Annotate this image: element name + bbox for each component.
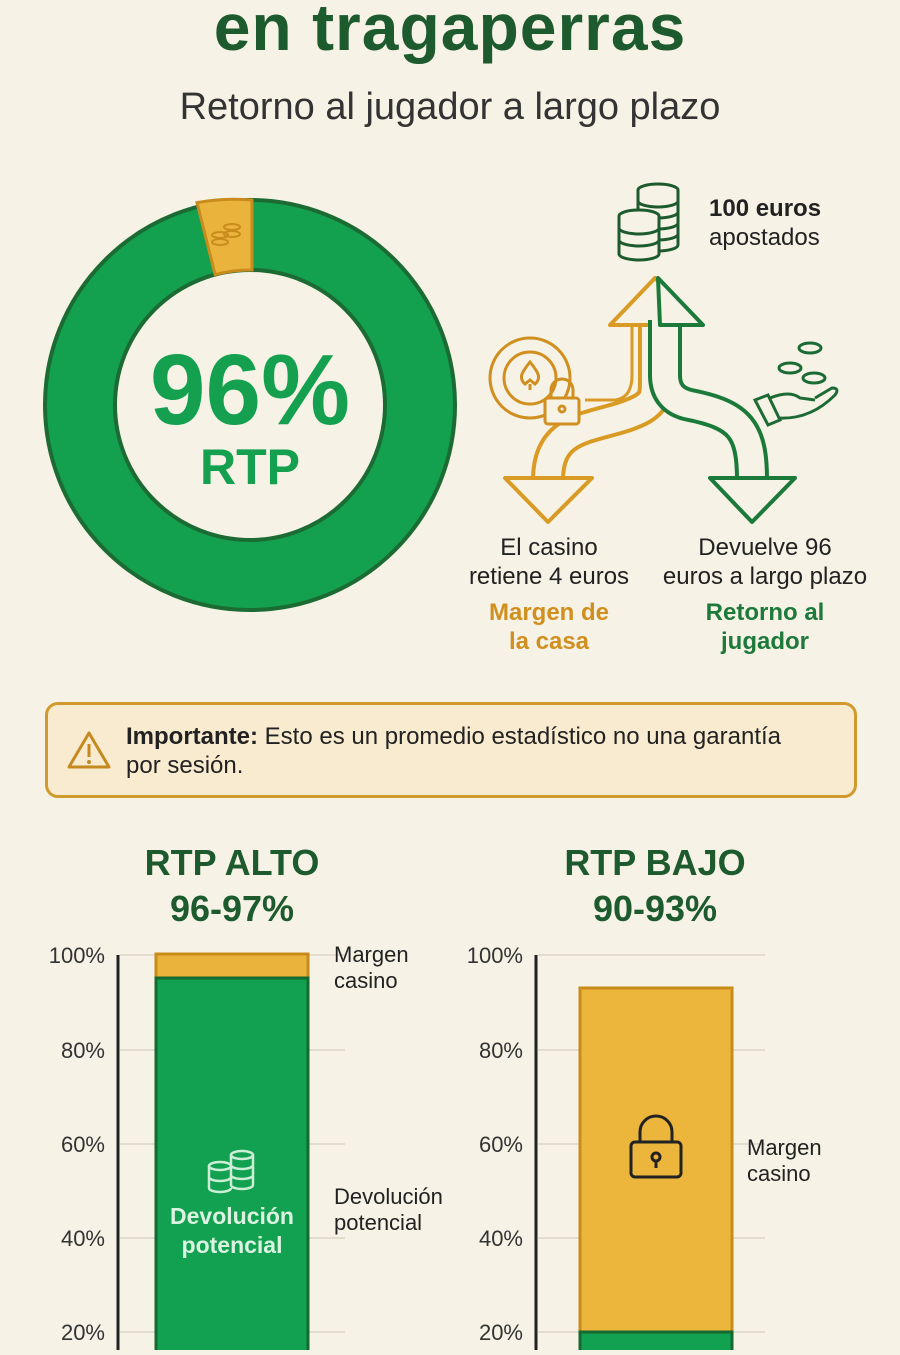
donut label: RTP <box>200 439 300 495</box>
label: margen de la casa <box>489 599 609 655</box>
label: devuelve 96: euros a largo plazo <box>663 563 867 590</box>
axis labels: 100% <box>49 943 105 968</box>
axis labels: 60% <box>479 1132 523 1157</box>
bar: RTP alto: potencial <box>182 1232 282 1258</box>
label: devuelve 96: Devuelve 96 <box>698 534 832 561</box>
bar charts <box>49 942 822 1350</box>
axis labels: 80% <box>61 1038 105 1063</box>
donut chart <box>43 198 457 612</box>
bar labels: RTP alto: casino <box>334 968 398 993</box>
label: 100 euros apostados: apostados <box>709 224 820 251</box>
heading: RTP alto: RTP ALTO <box>145 842 319 883</box>
green arrow <box>658 278 795 522</box>
heading: RTP alto: 96-97% <box>170 888 294 929</box>
bar labels: RTP bajo: casino <box>747 1161 811 1186</box>
bar: RTP alto <box>156 954 308 1355</box>
bar: RTP alto: Devolución <box>170 1203 294 1229</box>
axis labels: 100% <box>467 943 523 968</box>
label: retorno al jugador: jugador <box>721 628 809 655</box>
axis labels: 20% <box>61 1320 105 1345</box>
axis labels: 40% <box>61 1226 105 1251</box>
callout text: por sesión. <box>126 752 243 779</box>
bar: RTP bajo <box>580 988 732 1355</box>
label: casino retains: El casino <box>500 534 598 561</box>
callout text <box>126 723 781 779</box>
donut value: 96% <box>150 334 350 446</box>
label: devuelve 96 <box>663 534 867 590</box>
heading: RTP bajo: RTP BAJO <box>564 842 746 883</box>
bar labels: RTP bajo: Margen <box>747 1135 822 1160</box>
label: 100 euros apostados: 100 euros <box>709 195 821 222</box>
heading: RTP alto <box>145 842 319 929</box>
label: margen de la casa: la casa <box>509 628 589 655</box>
icon: warning <box>68 731 111 768</box>
flow diagram <box>488 182 838 524</box>
icon: coin stacks <box>619 184 678 260</box>
label: 100 euros apostados <box>709 195 821 251</box>
heading: RTP bajo: 90-93% <box>593 888 717 929</box>
label: casino retains: retiene 4 euros <box>469 563 629 590</box>
axis labels: 40% <box>479 1226 523 1251</box>
label: retorno al jugador <box>706 599 824 655</box>
bar labels: RTP bajo <box>747 1135 822 1186</box>
heading: RTP bajo <box>564 842 746 929</box>
bar labels: RTP alto: Margen <box>334 942 409 967</box>
gold arrow <box>505 278 700 522</box>
bar labels: RTP alto <box>334 942 443 1235</box>
axis labels: 80% <box>479 1038 523 1063</box>
axis labels: 60% <box>61 1132 105 1157</box>
label: margen de la casa: Margen de <box>489 599 609 626</box>
bar labels: RTP alto: Devolución <box>334 1184 443 1209</box>
label: casino retains <box>469 534 629 590</box>
icon: casino chip with lock <box>490 338 579 424</box>
axis labels: 20% <box>479 1320 523 1345</box>
label: retorno al jugador: Retorno al <box>706 599 824 626</box>
gold segment <box>197 199 252 275</box>
bar labels: RTP alto: potencial <box>334 1210 422 1235</box>
subtitle: Retorno al jugador a largo plazo <box>180 86 720 128</box>
axis labels <box>49 943 523 1345</box>
callout: importante <box>45 702 857 798</box>
icon: hand with coins <box>755 343 837 425</box>
callout text: Importante: Esto es un promedio estadístico no una garantía <box>126 723 781 750</box>
